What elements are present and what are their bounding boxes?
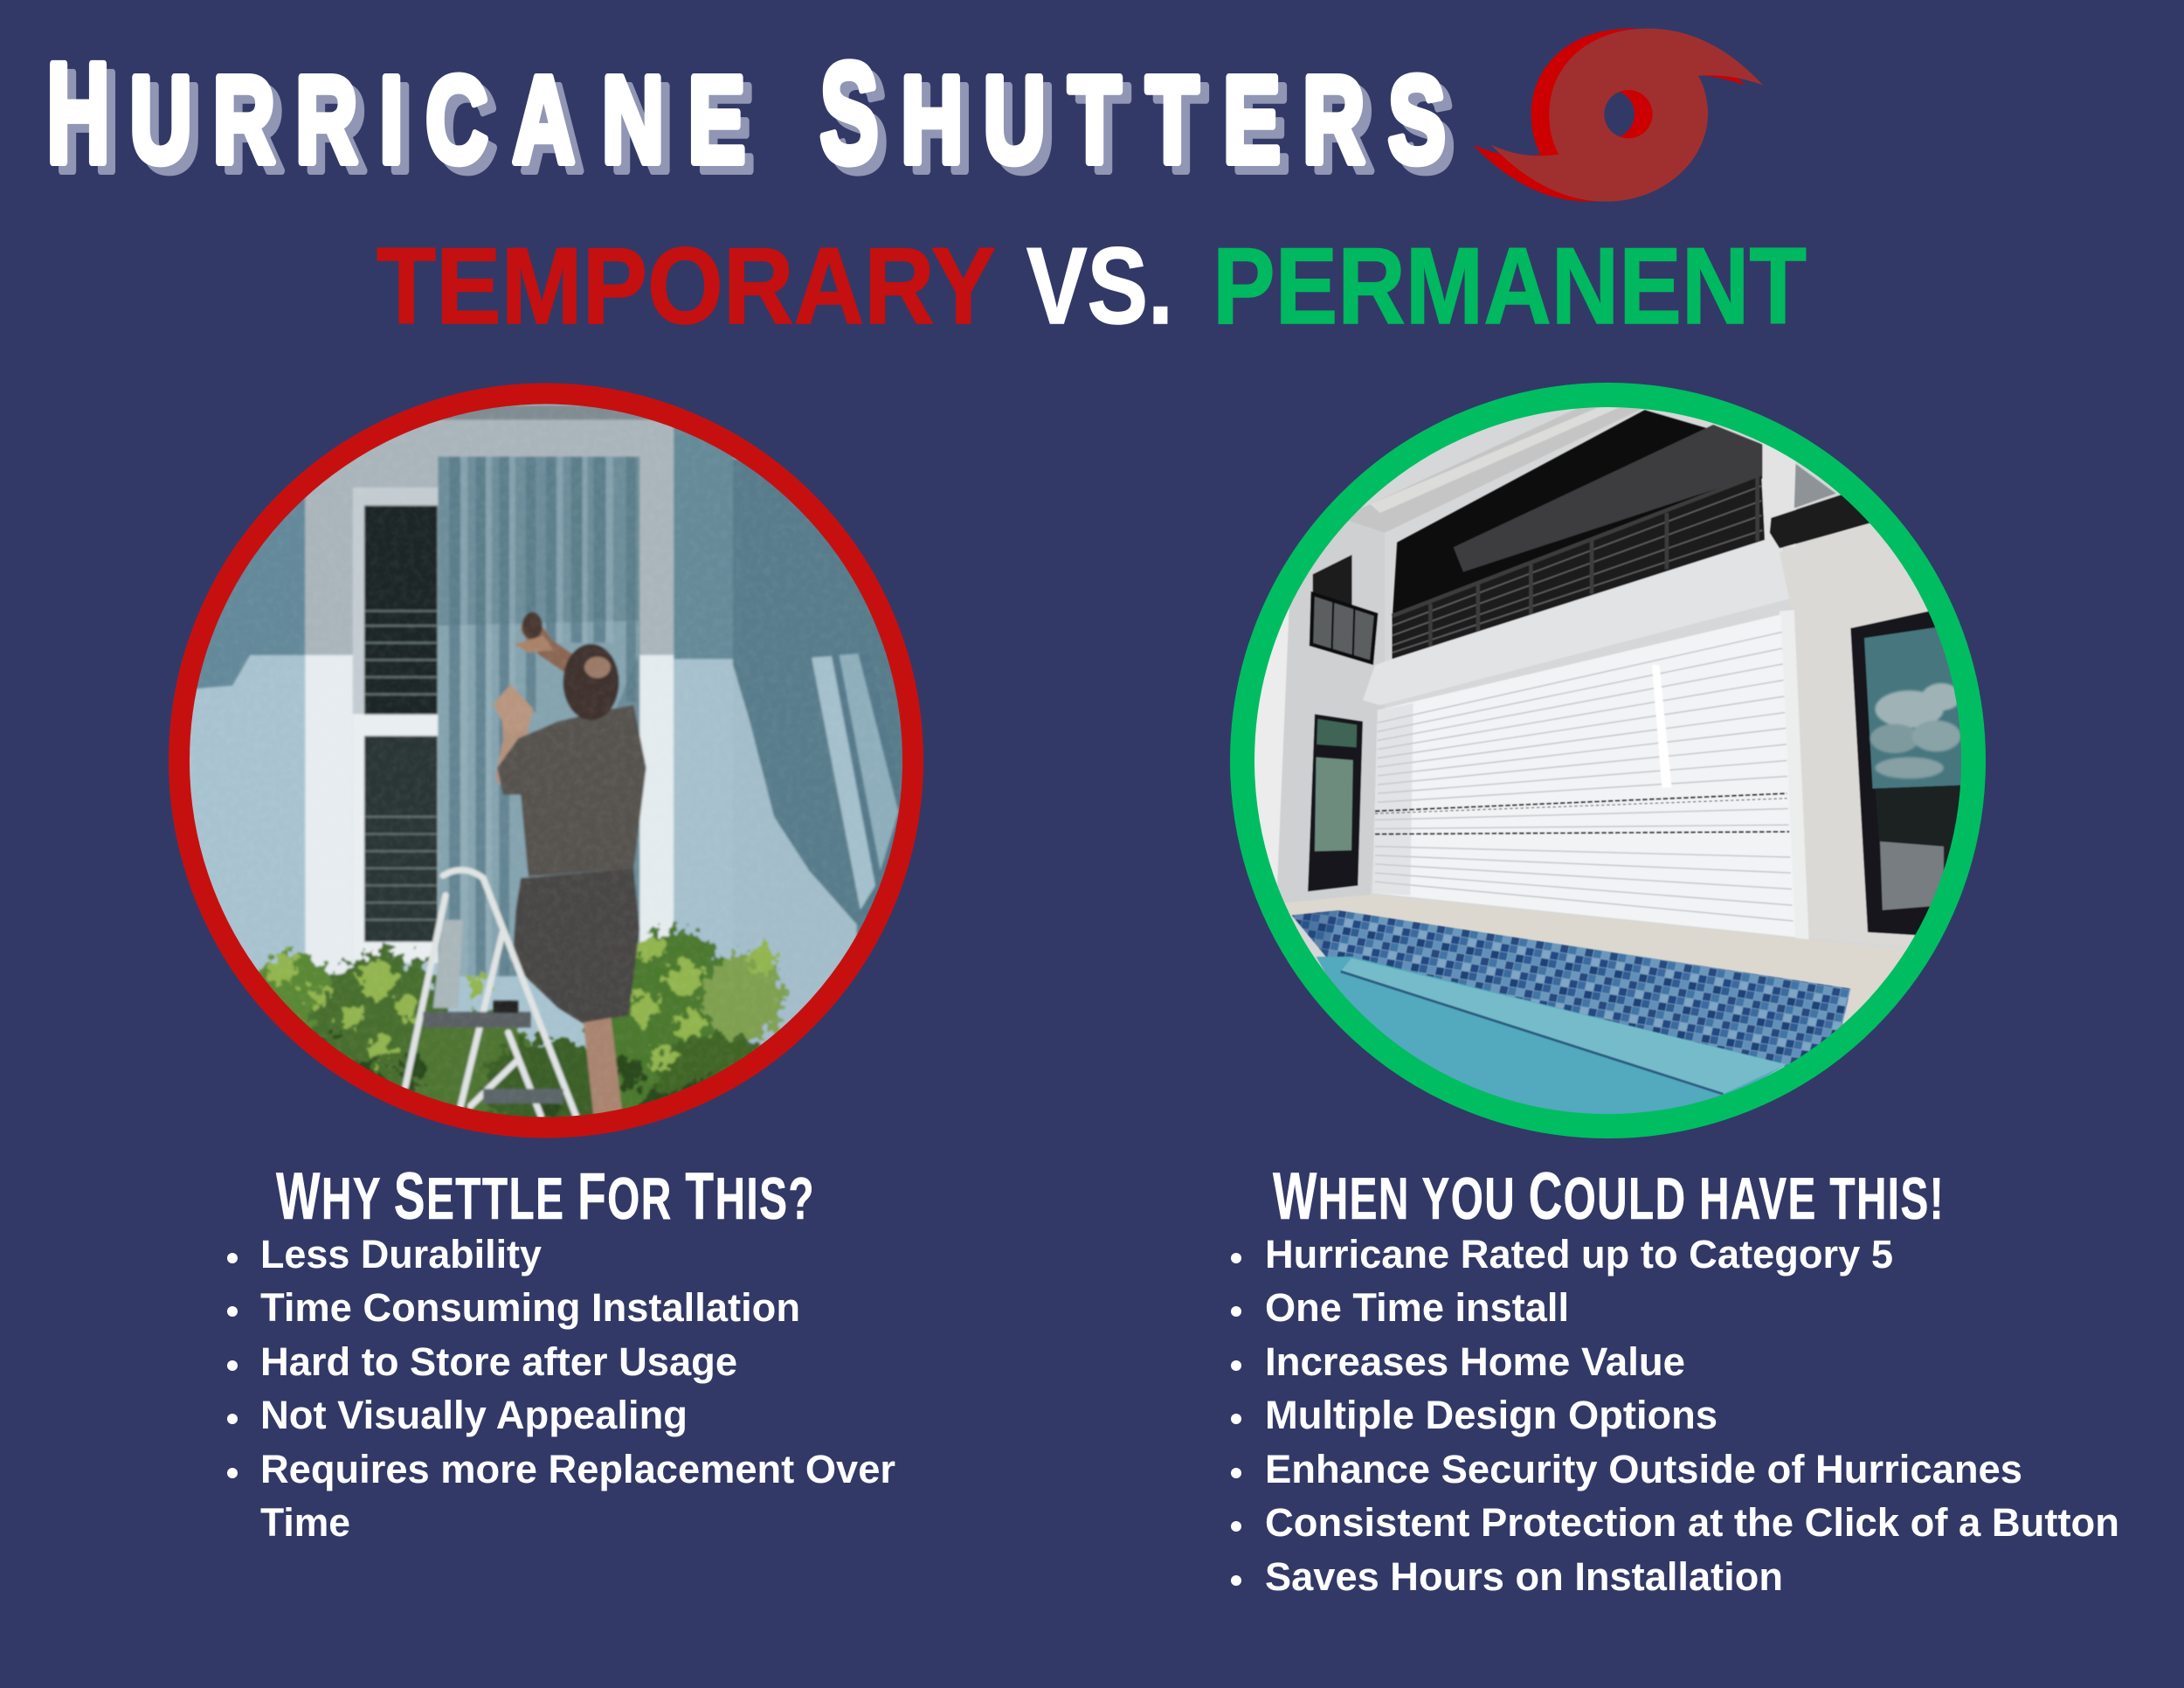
frame upper [305, 405, 674, 655]
title: E [1223, 51, 1281, 189]
subtitle word: temporary: TEMPORARY [377, 226, 996, 347]
balcony dark [1393, 410, 1762, 621]
small window and balcony box [1313, 555, 1352, 606]
title: E [688, 51, 745, 189]
text block: temporary shutter drawbacks: Time Consuming Installation [260, 1285, 800, 1330]
text block: permanent shutter benefits: Hurricane Rated up to Category 5 [1265, 1232, 1893, 1276]
heading: when you could: WHEN YOU COULD HAVE THIS! [1273, 1159, 1945, 1234]
water [1317, 957, 1787, 1131]
right wall [1780, 522, 1992, 954]
title: C [425, 51, 488, 189]
shutter [1372, 614, 1795, 937]
panel: permanent shutters photo [1223, 376, 1992, 1145]
bushes [238, 930, 784, 1145]
text block: permanent shutter benefits: Multiple Design Options [1265, 1393, 1717, 1437]
tile wall [1292, 910, 1850, 1067]
eave [1770, 494, 1871, 549]
beam [1363, 540, 1795, 705]
text block: permanent shutter benefits [1231, 1232, 2119, 1599]
title: I [379, 51, 404, 189]
title: R [1303, 51, 1365, 189]
subtitle [377, 226, 1807, 347]
title: T [1146, 51, 1199, 189]
title [46, 33, 1446, 192]
text block: temporary shutter drawbacks: Hard to Store after Usage [260, 1339, 737, 1384]
title: S [1388, 51, 1446, 189]
text block: permanent shutter benefits: Saves Hours on Installation [1265, 1554, 1783, 1599]
window [353, 488, 439, 715]
deck [1286, 895, 1914, 1018]
railing [1393, 474, 1765, 659]
man [531, 628, 571, 665]
title: A [513, 51, 575, 189]
text block: permanent shutter benefits: Consistent Protection at the Click of a Button [1265, 1500, 2119, 1545]
text block: permanent shutter benefits: One Time install [1265, 1285, 1569, 1330]
ring: red [179, 393, 913, 1127]
left wall [1307, 554, 1379, 892]
title: S [819, 33, 879, 192]
subtitle word: permanent: PERMANENT [1213, 226, 1807, 347]
left door [1308, 714, 1363, 891]
title: H [46, 33, 110, 192]
soffit [1341, 395, 1645, 533]
icon: hurricane symbol [1473, 29, 1763, 202]
subtitle word: vs: VS. [1026, 226, 1173, 347]
text block: temporary shutter drawbacks: Not Visually Appealing [260, 1393, 688, 1437]
text block: temporary shutter drawbacks [227, 1232, 895, 1545]
text block: permanent shutter benefits: Increases Home Value [1265, 1339, 1685, 1384]
left wall shadow [157, 376, 305, 692]
ladder [405, 870, 576, 1116]
ring: green [1242, 395, 1973, 1126]
title: H [901, 51, 963, 189]
panel: temporary shutters photo [157, 376, 943, 1145]
title: T [1068, 51, 1121, 189]
heading: why settle: WHY SETTLE FOR THIS? [276, 1159, 815, 1234]
man: shorts, leg, head in front of bushes [512, 868, 639, 1024]
title: R [213, 51, 275, 189]
right wall [674, 419, 734, 660]
shutter [438, 457, 639, 976]
text block: permanent shutter benefits: Enhance Security Outside of Hurricanes [1265, 1447, 2022, 1491]
title: N [602, 51, 664, 189]
title: R [295, 51, 357, 189]
right door [1850, 611, 1960, 936]
title: U [129, 51, 192, 189]
title: U [984, 51, 1046, 189]
text block: temporary shutter drawbacks: Less Durability [260, 1232, 542, 1276]
text block: temporary shutter drawbacks: Requires more Replacement Over [260, 1447, 895, 1491]
text block: temporary shutter drawbacks: Time [260, 1500, 350, 1545]
leaning panels [812, 653, 904, 920]
